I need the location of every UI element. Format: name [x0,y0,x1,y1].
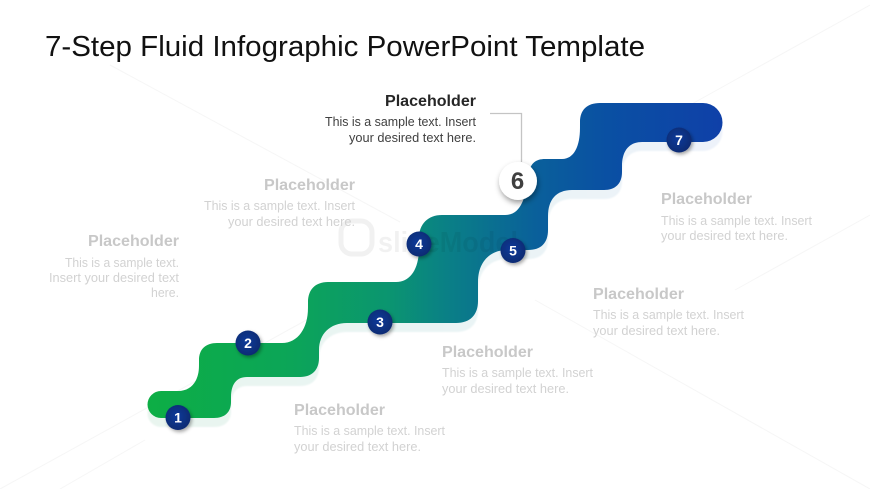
text block: step 1: your desired text here. [294,440,421,454]
text block: step 3: Placeholder [442,344,533,361]
shape body [148,103,722,418]
text block: step 5: your desired text here. [593,324,720,338]
title: 7-Step Fluid Infographic PowerPoint Template [45,31,645,63]
text block: step 4 [204,177,356,229]
text block: step 4: Placeholder [264,177,355,194]
text block: step 5: This is a sample text. Insert [593,308,745,322]
text block: step 2 [49,233,180,300]
fluid staircase shape [148,103,722,427]
marker 6: 6 [511,168,524,195]
text block: step 6: This is a sample text. Insert [325,115,477,129]
text block: step 4: This is a sample text. Insert [204,199,356,213]
marker 2: 2 [244,335,252,351]
shape shadow [148,112,722,427]
text block: step 6: your desired text here. [349,131,476,145]
text block: step 6: Placeholder [385,93,476,110]
text block: step 2: This is a sample text. [65,256,179,270]
marker 5 [500,238,526,263]
marker 7: 7 [675,132,683,148]
marker 3: 3 [376,314,384,330]
marker 3 [368,310,392,334]
marker 4: 4 [415,236,423,252]
text block: step 7 [661,191,813,243]
text block: step 7: your desired text here. [661,229,788,243]
marker 1: 1 [174,410,182,426]
text block: step 1: This is a sample text. Insert [294,424,446,438]
text block: step 3: your desired text here. [442,382,569,396]
text block: step 3 [442,344,594,396]
text block: step 2: here. [151,286,179,300]
connector line: step 6 [490,114,522,162]
marker 7 [666,128,692,152]
text block: step 6 [325,93,477,145]
text block: step 1 [294,402,446,454]
text block: step 1: Placeholder [294,402,385,419]
text block: step 2: Insert your desired text [49,271,180,285]
watermark: slideModel [378,227,518,259]
text block: step 5 [593,286,745,338]
marker 2 [236,330,260,356]
marker 1 [166,405,190,430]
text block: step 4: your desired text here. [228,215,355,229]
marker 6 [499,162,537,200]
marker 4 [406,232,432,256]
marker 5: 5 [509,242,517,258]
watermark [341,221,518,259]
text block: step 7: Placeholder [661,191,752,208]
text block: step 2: Placeholder [88,233,179,250]
text block: step 7: This is a sample text. Insert [661,214,813,228]
text block: step 5: Placeholder [593,286,684,303]
text block: step 3: This is a sample text. Insert [442,366,594,380]
